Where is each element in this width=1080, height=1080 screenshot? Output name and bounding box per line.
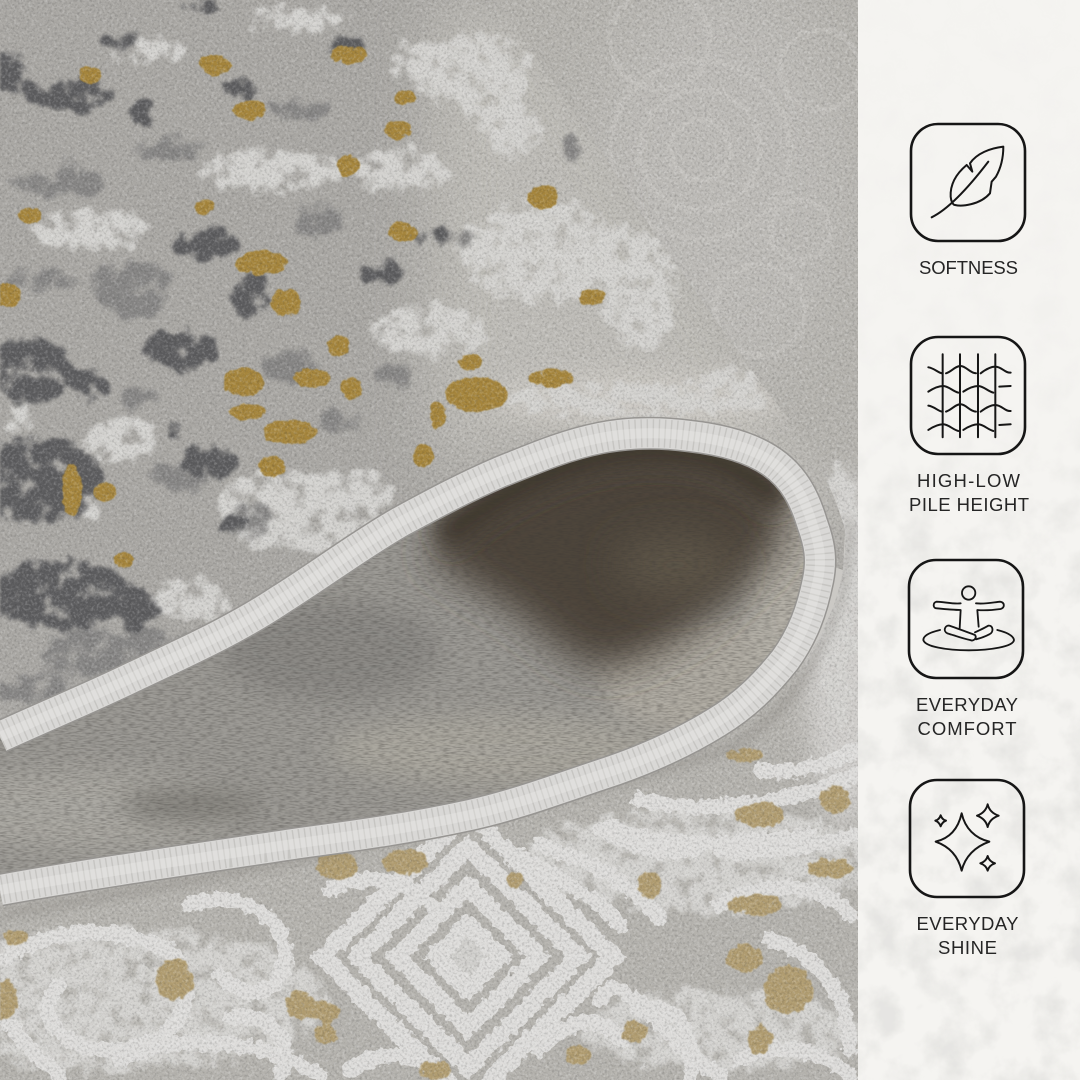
mid grey mottling xyxy=(0,92,590,710)
label: everyday shine: SHINE xyxy=(938,937,997,958)
dark grey patches xyxy=(0,0,454,636)
floor rug: pale gold flecks xyxy=(0,747,854,1080)
rolled rug: woven underside with deep shadow xyxy=(0,450,804,874)
label: high-low pile height: PILE HEIGHT xyxy=(909,494,1029,515)
feature: high-low pile height xyxy=(909,337,1029,515)
floor rug: filigree in the upper right xyxy=(610,0,860,355)
light mottling xyxy=(0,0,780,630)
rolled rug: abstract patterned top surface xyxy=(0,0,860,780)
label: softness: SOFTNESS xyxy=(919,257,1018,278)
icon: meditating figure xyxy=(909,560,1023,678)
side panel: textured white background xyxy=(858,0,1080,1080)
icon: feather xyxy=(911,124,1025,241)
rolled rug: white serged binding xyxy=(0,433,820,890)
feature: softness xyxy=(911,124,1025,278)
cavity shadow xyxy=(425,448,786,668)
icon: pile height fibres xyxy=(911,337,1025,454)
label: everyday comfort xyxy=(916,694,1018,739)
rolled rug: outer lip of the fold xyxy=(700,395,845,728)
feature: everyday shine xyxy=(910,780,1024,958)
feature: everyday comfort xyxy=(909,560,1023,739)
label: high-low pile height xyxy=(909,470,1029,515)
floor rug: white raised motif with concentric diamonds xyxy=(0,750,855,1080)
icon: sparkles xyxy=(910,780,1024,897)
label: everyday comfort: EVERYDAY xyxy=(916,694,1018,715)
contact shadow under the roll xyxy=(0,520,850,915)
ochre flecks xyxy=(0,45,607,569)
label: everyday comfort: COMFORT xyxy=(918,718,1016,739)
label: high-low pile height: HIGH-LOW xyxy=(917,470,1021,491)
label: everyday shine xyxy=(916,913,1018,958)
floor rug: white mottling in the lower band xyxy=(0,450,890,1080)
label: everyday shine: EVERYDAY xyxy=(916,913,1018,934)
